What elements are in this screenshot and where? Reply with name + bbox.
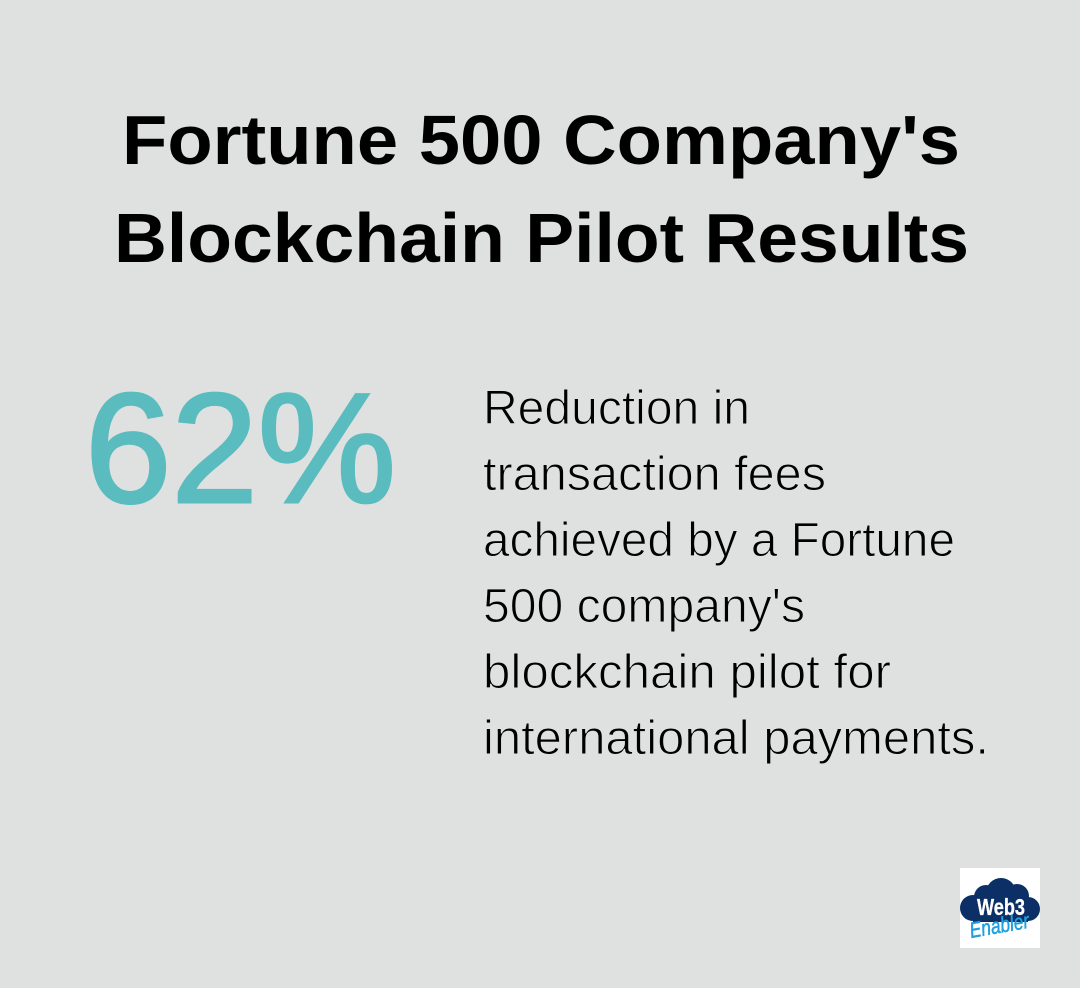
description text: international payments. (483, 712, 989, 765)
description text: 500 company's (483, 580, 805, 633)
description text: transaction fees (483, 448, 826, 501)
logo wordmark: Web3: Web3 (977, 894, 1025, 920)
title (114, 101, 969, 277)
description text: Reduction in (483, 382, 750, 435)
title: Blockchain Pilot Results (114, 199, 969, 277)
description text: blockchain pilot for (483, 646, 891, 699)
description text (483, 382, 989, 765)
icon: cloud (960, 878, 1040, 922)
logo: Web3 Enabler (960, 868, 1040, 948)
description text: achieved by a Fortune (483, 514, 955, 567)
logo wordmark: Enabler: Enabler (968, 908, 1032, 943)
key statistic: 62%: 62% (85, 362, 396, 536)
title: Fortune 500 Company's (122, 101, 960, 179)
